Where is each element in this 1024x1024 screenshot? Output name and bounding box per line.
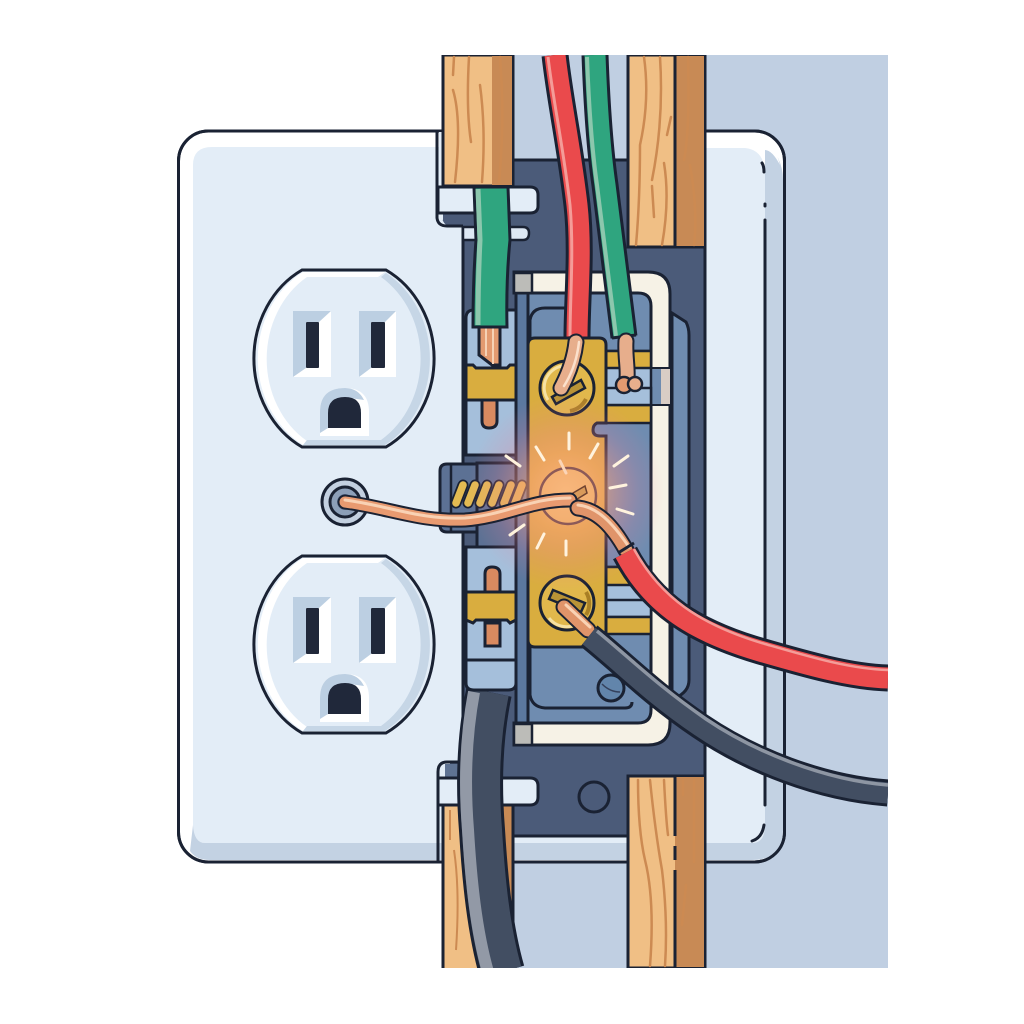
upper strap ears (438, 187, 538, 240)
sparks (506, 433, 633, 555)
upper right stud (628, 55, 705, 247)
cream conduit (514, 272, 670, 745)
glow: electrical arc (468, 394, 664, 590)
lower strap ear (438, 778, 538, 805)
red wire lower end cap overlay (618, 543, 634, 553)
green wire left (473, 187, 510, 327)
cable collar (466, 660, 516, 690)
wall strip between studs (513, 55, 628, 175)
lower right stud (628, 776, 705, 968)
copper wire to red (578, 505, 629, 550)
left terminal column: upper block (466, 310, 516, 455)
red wire lower (625, 549, 888, 678)
lower left stud (443, 806, 513, 968)
wall background (443, 55, 888, 968)
brass terminal bar (528, 338, 606, 647)
black cable (466, 692, 502, 972)
panel: wall plate (178, 131, 784, 862)
black wire lower (589, 631, 888, 793)
green wire right (587, 55, 636, 338)
damaged center screw (540, 461, 596, 524)
lower terminal screw (540, 576, 594, 630)
center screw grommet (322, 479, 368, 525)
copper strand to upper screw (561, 342, 579, 388)
junction box (437, 131, 705, 862)
copper strand looped knot (616, 341, 642, 393)
red wire upper (548, 55, 590, 338)
upper terminal screw (540, 361, 594, 415)
outlet: lower receptacle (254, 556, 434, 733)
inner cavity (516, 293, 689, 723)
upper left stud (443, 55, 513, 186)
brass terminal tabs right (606, 351, 651, 634)
copper wire from grommet (345, 498, 570, 520)
screw housing with threaded screw (440, 463, 522, 547)
left terminal column: lower block (466, 547, 516, 688)
copper wire to black (564, 605, 590, 630)
outlet: upper receptacle (254, 270, 434, 447)
box mounting hole (579, 782, 609, 812)
